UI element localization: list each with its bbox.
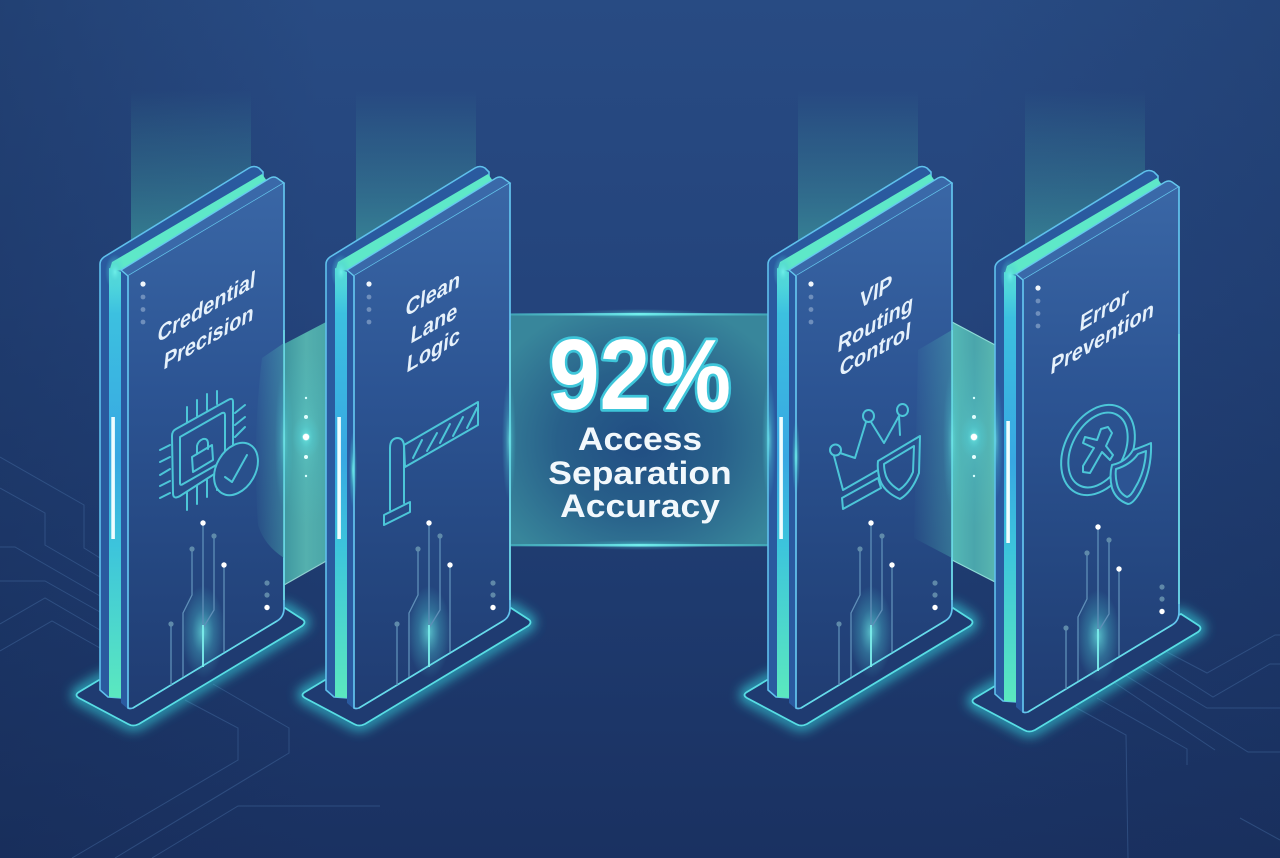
heading: clean lane logic: Clean — [404, 265, 462, 322]
metric label: Access — [578, 422, 702, 458]
heading: error prevention: Prevention — [1049, 295, 1155, 380]
pillar 2: clean lane logic — [302, 166, 530, 726]
central panel — [508, 309, 770, 550]
heading: VIP routing control — [836, 269, 915, 382]
heading: clean lane logic: Lane — [409, 297, 459, 349]
heading: clean lane logic — [404, 265, 462, 378]
heading: credential precision: Credential — [156, 265, 257, 348]
metric label — [548, 422, 732, 525]
pillar 1: credential precision — [76, 166, 304, 726]
background circuit traces left — [0, 457, 380, 858]
heading: error prevention: Error — [1078, 282, 1130, 337]
icon: crown with shield — [830, 404, 920, 509]
connector: VIP to error — [944, 322, 1004, 583]
icon: cross with shield — [1046, 392, 1151, 508]
light beams above pillars — [131, 90, 1145, 265]
metric label: Accuracy — [560, 489, 720, 525]
heading: credential precision: Precision — [162, 298, 255, 375]
key metric: 92 percent: 92% — [549, 319, 731, 431]
heading: VIP routing control: Routing — [836, 289, 915, 358]
icon: chip with lock and check — [160, 391, 267, 510]
heading: VIP routing control: VIP — [858, 269, 893, 314]
icon: barrier gate — [384, 402, 478, 525]
pillar 3: VIP routing control — [744, 166, 972, 726]
heading: VIP routing control: Control — [838, 317, 912, 382]
connector: credential to lane — [276, 321, 336, 585]
pillar 4: error prevention — [972, 170, 1200, 732]
background circuit traces right — [1075, 635, 1280, 858]
heading: clean lane logic: Logic — [405, 321, 461, 378]
metric label: Separation — [548, 456, 732, 492]
